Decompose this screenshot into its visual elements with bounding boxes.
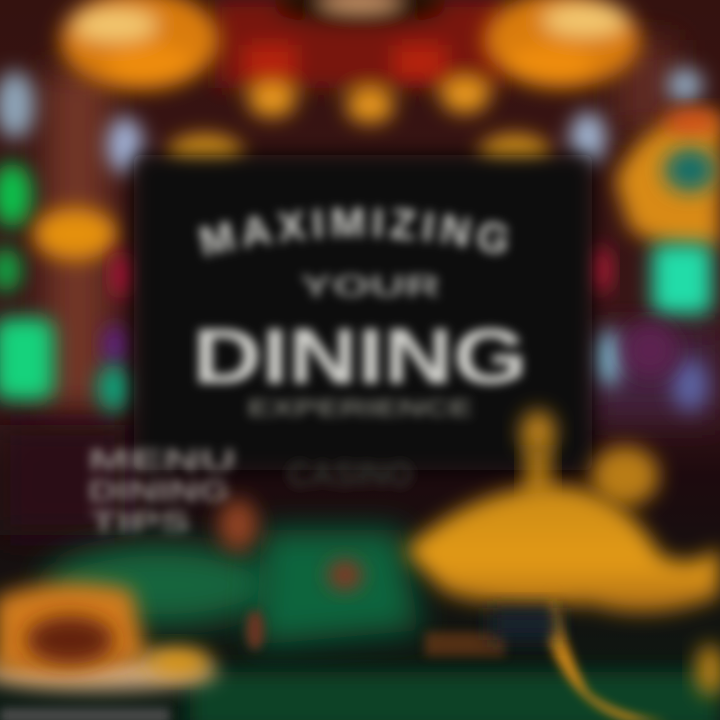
left slot machines <box>0 163 132 412</box>
subtitle: EXPERIENCE <box>248 395 472 422</box>
panel: black title board <box>134 155 592 470</box>
text line 3: TIPS <box>90 506 190 539</box>
camel figure <box>405 410 720 720</box>
green table <box>45 499 720 720</box>
right slot machines <box>590 110 720 411</box>
text line 2: DINING <box>88 475 230 508</box>
heading line 2: YOUR <box>300 270 441 303</box>
heading line 1: MAXIMIZING <box>193 201 514 262</box>
title text <box>191 201 530 400</box>
ceiling lights band <box>215 0 505 123</box>
heading line 3: DINING <box>192 312 528 400</box>
wall lights <box>0 68 703 175</box>
left text block <box>88 444 236 539</box>
food plate <box>0 583 218 720</box>
left ceiling lamp <box>60 0 220 90</box>
caption below board: CASINO <box>288 456 412 494</box>
right ceiling lamp <box>484 0 640 88</box>
text line 1: MENU <box>88 444 236 477</box>
